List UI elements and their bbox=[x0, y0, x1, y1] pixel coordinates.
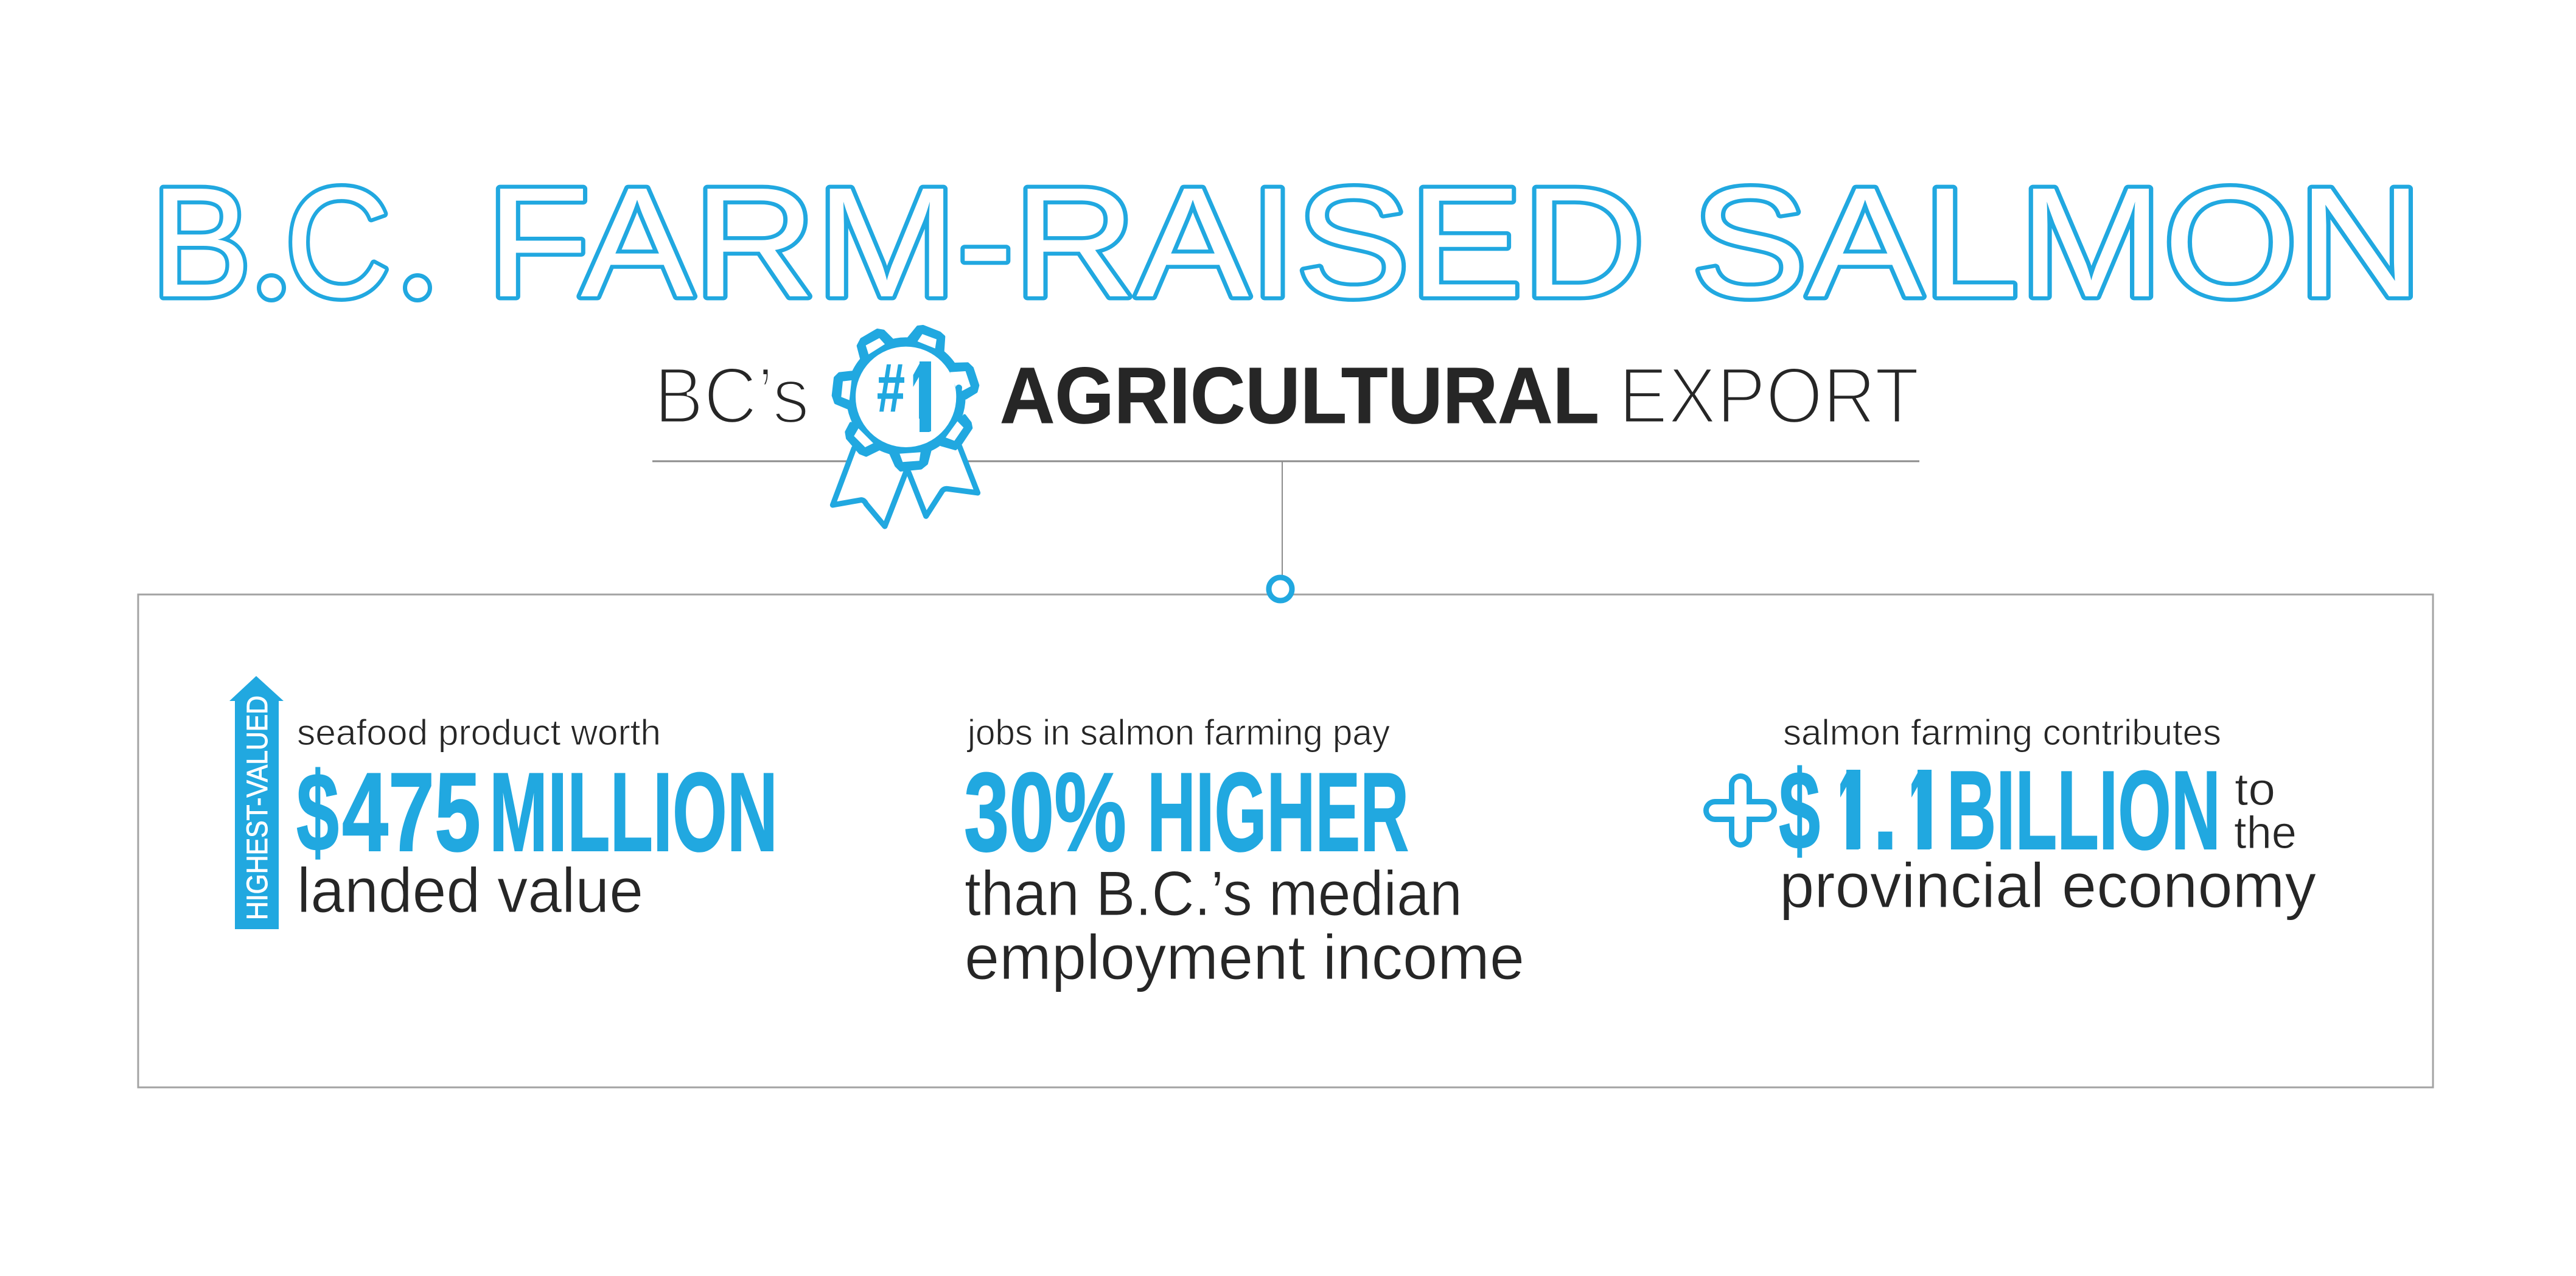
stat: highest-valued seafood: 475 bbox=[342, 749, 481, 874]
stat: highest-valued seafood: landed value bbox=[297, 856, 643, 926]
icon: up arrow with label bbox=[229, 676, 284, 929]
stat: provincial economy: to bbox=[2235, 764, 2275, 815]
stat: farm jobs pay: employment income bbox=[965, 922, 1524, 993]
stat: provincial economy: the bbox=[2234, 807, 2297, 858]
stat: farm jobs pay: HIGHER bbox=[1147, 749, 1409, 874]
stat: provincial economy: 1 bbox=[1909, 747, 1931, 873]
stat: provincial economy: $ bbox=[1779, 747, 1820, 873]
stat: provincial economy bbox=[1715, 713, 2316, 921]
title: . bbox=[259, 214, 283, 310]
title: SALMON bbox=[1692, 155, 2423, 330]
icon: number one award ribbon: 1 bbox=[911, 343, 930, 452]
icon: number one award ribbon: # bbox=[877, 350, 905, 426]
title: SALMON bbox=[1692, 155, 2423, 330]
subtitle: EXPORT bbox=[1619, 350, 1919, 440]
title: C bbox=[285, 155, 391, 330]
title: C bbox=[285, 155, 391, 330]
stat: highest-valued seafood bbox=[229, 676, 778, 929]
title: B bbox=[151, 155, 251, 330]
stat: provincial economy: provincial economy bbox=[1779, 851, 2316, 921]
title: FARM-RAISED bbox=[486, 155, 1645, 330]
connector dot bbox=[1269, 577, 1292, 601]
stat: farm jobs pay: than B.C.’s median bbox=[965, 859, 1462, 929]
stat: farm jobs pay bbox=[964, 713, 1524, 993]
stat: provincial economy: 1 bbox=[1838, 747, 1860, 873]
panel: statistics box bbox=[138, 594, 2433, 1087]
stat: provincial economy: . bbox=[1873, 747, 1898, 873]
stat: farm jobs pay: 30% bbox=[964, 749, 1126, 874]
stat: provincial economy: salmon farming contributes bbox=[1783, 713, 2221, 753]
title bbox=[151, 155, 2423, 330]
title: . bbox=[405, 214, 429, 310]
subtitle: BC’s bbox=[654, 350, 809, 440]
stat: highest-valued seafood: seafood product worth bbox=[297, 713, 661, 753]
icon: up arrow with label: HIGHEST-VALUED bbox=[242, 696, 274, 920]
stat: highest-valued seafood: MILLION bbox=[489, 749, 778, 874]
title: FARM-RAISED bbox=[486, 155, 1645, 330]
stat: farm jobs pay: jobs in salmon farming pay bbox=[966, 713, 1390, 753]
subtitle bbox=[654, 350, 1919, 440]
icon: plus sign bbox=[1715, 785, 1765, 836]
title: B bbox=[151, 155, 251, 330]
stat: provincial economy: BILLION bbox=[1947, 747, 2221, 873]
stat: highest-valued seafood: $ bbox=[296, 749, 339, 874]
subtitle: AGRICULTURAL bbox=[1000, 350, 1599, 440]
icon: number one award ribbon bbox=[832, 327, 978, 526]
